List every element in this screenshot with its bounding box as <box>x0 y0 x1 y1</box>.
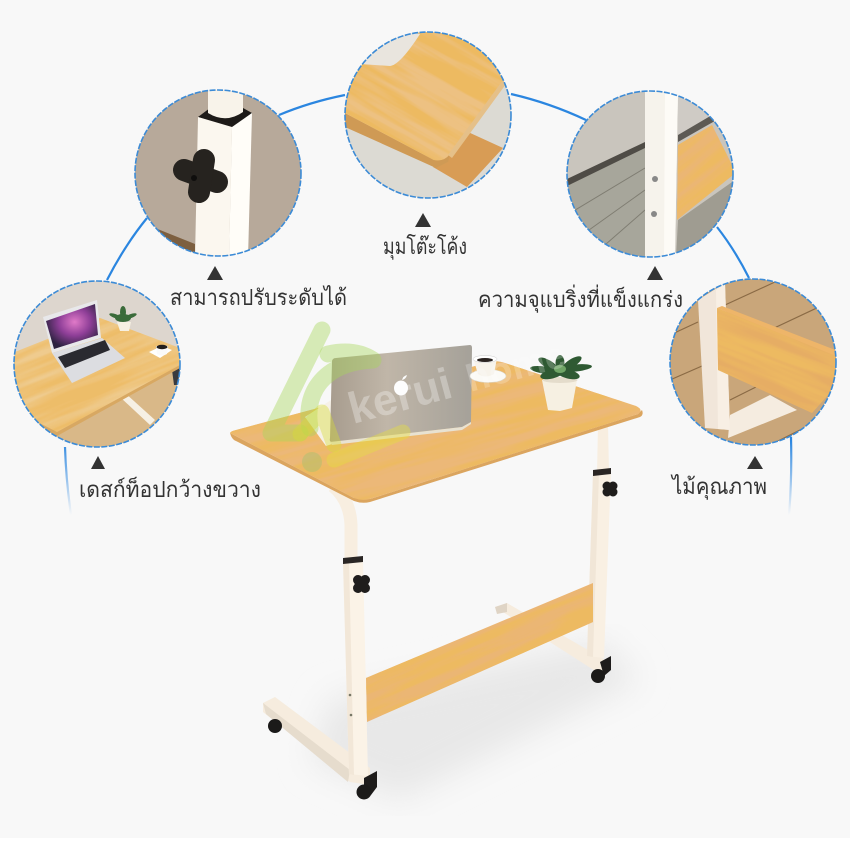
lower bar <box>728 395 797 438</box>
desk product <box>230 345 643 800</box>
support beam <box>433 132 503 187</box>
watermark text <box>343 334 570 434</box>
arrow marker: bearing <box>647 266 663 280</box>
wooden panel <box>677 125 733 220</box>
circle: bearing strength <box>566 90 734 258</box>
coffee cup <box>470 356 506 382</box>
front edge <box>345 113 450 168</box>
knob <box>184 160 217 192</box>
right leg <box>587 424 611 658</box>
table top edge <box>230 410 643 503</box>
laptop <box>305 345 472 446</box>
arrow marker: height <box>207 266 223 280</box>
mini plant <box>109 306 137 331</box>
floor shadow <box>310 640 640 800</box>
back foot bar <box>495 603 612 674</box>
potted plant <box>530 354 592 411</box>
desk surface <box>14 318 180 432</box>
desk under leg <box>122 396 155 425</box>
wooden corner <box>345 32 504 160</box>
square post <box>195 117 232 258</box>
circle: wide desktop <box>13 280 181 448</box>
label: curved corner: มุมโต๊ะโค้ง <box>383 234 467 260</box>
circle: quality wood <box>669 278 837 446</box>
right knob <box>607 486 613 492</box>
screws <box>652 176 658 182</box>
mini laptop <box>43 300 125 383</box>
wood cross panel <box>366 583 593 722</box>
collar <box>198 108 252 128</box>
watermark logo <box>271 330 403 472</box>
watermark text: kerui <box>343 359 457 434</box>
table top <box>230 361 641 500</box>
circle: height knob <box>135 88 302 258</box>
arrow marker: wide desktop <box>91 456 105 469</box>
label: adjustable height: สามารถปรับระดับได้ <box>170 285 347 310</box>
post <box>645 91 678 258</box>
connecting blue arc <box>65 94 791 515</box>
wooden beam <box>717 308 836 413</box>
left leg <box>333 486 368 776</box>
arrow marker: corner <box>415 213 431 227</box>
mouse <box>363 34 420 66</box>
front wheel <box>356 771 377 800</box>
label: wide desktop: เดสก์ท็อปกว้างขวาง <box>79 475 261 502</box>
tube <box>208 88 243 118</box>
left knob <box>358 580 365 588</box>
apple logo <box>394 375 408 396</box>
right wheel <box>591 656 611 683</box>
circle: rounded corner <box>344 31 512 199</box>
left back wheel <box>268 719 282 733</box>
mini cup <box>149 345 172 358</box>
watermark text: home <box>461 334 570 401</box>
left foot <box>263 697 370 785</box>
arrow marker: wood <box>747 456 763 469</box>
label: strong bearing: ความจุแบริ่งที่แข็งแกร่ง <box>478 284 683 313</box>
label: quality wood: ไม้คุณภาพ <box>670 474 767 500</box>
white post <box>698 283 730 430</box>
